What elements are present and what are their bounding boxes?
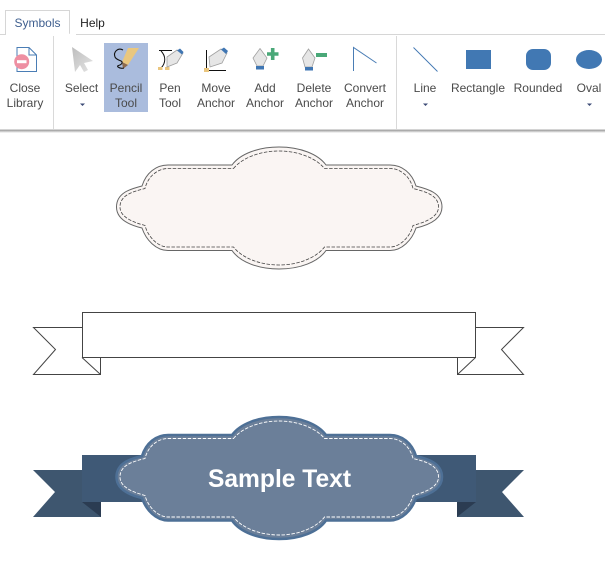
tool: Delete Anchor: Delete	[297, 81, 332, 95]
tool: Rounded	[514, 49, 562, 95]
tool: Select: Select	[65, 81, 99, 95]
tool: Rounded: Rounded	[514, 81, 562, 95]
tool: Close Library: Library	[7, 96, 43, 110]
tool: Add Anchor: Add	[254, 81, 276, 95]
badge text: Sample Text	[208, 466, 351, 493]
tool: Pen Tool: Pen	[159, 81, 181, 95]
tool: Pencil Tool, selected: Tool	[115, 96, 137, 110]
tool: Convert Anchor: Convert	[344, 81, 387, 95]
tab: Symbols: Symbols	[14, 16, 61, 30]
tool: Oval: Oval	[577, 81, 601, 95]
tool: Pencil Tool, selected: Pencil	[110, 81, 142, 95]
tool: Delete Anchor	[295, 49, 333, 110]
tool: Convert Anchor: Anchor	[346, 96, 384, 110]
tool: Pen Tool: Tool	[159, 96, 181, 110]
toolbar ribbon	[0, 0, 605, 133]
tab: Help: Help	[80, 16, 105, 30]
tool: Line	[414, 48, 438, 106]
tool: Add Anchor	[246, 48, 284, 110]
tool: Move Anchor: Move	[201, 81, 231, 95]
tool: Close Library: Close	[10, 81, 41, 95]
tool: Add Anchor: Anchor	[246, 96, 284, 110]
tool: Rectangle	[451, 50, 505, 95]
tool: Move Anchor	[197, 48, 235, 110]
blank label badge	[116, 147, 442, 269]
tool: Select	[65, 47, 99, 106]
tool: Convert Anchor	[344, 48, 387, 110]
tool: Line: Line	[414, 81, 437, 95]
tool: Pen Tool	[158, 48, 184, 110]
tool: Rectangle: Rectangle	[451, 81, 505, 95]
tool: Move Anchor: Anchor	[197, 96, 235, 110]
blank ribbon banner	[34, 312, 524, 374]
tool: Oval	[576, 50, 602, 106]
filled label badge	[116, 417, 442, 539]
tool: Delete Anchor: Anchor	[295, 96, 333, 110]
tool: Close Library	[7, 48, 43, 110]
tool: Pencil Tool, selected	[104, 43, 148, 112]
filled ribbon banner	[33, 455, 524, 517]
